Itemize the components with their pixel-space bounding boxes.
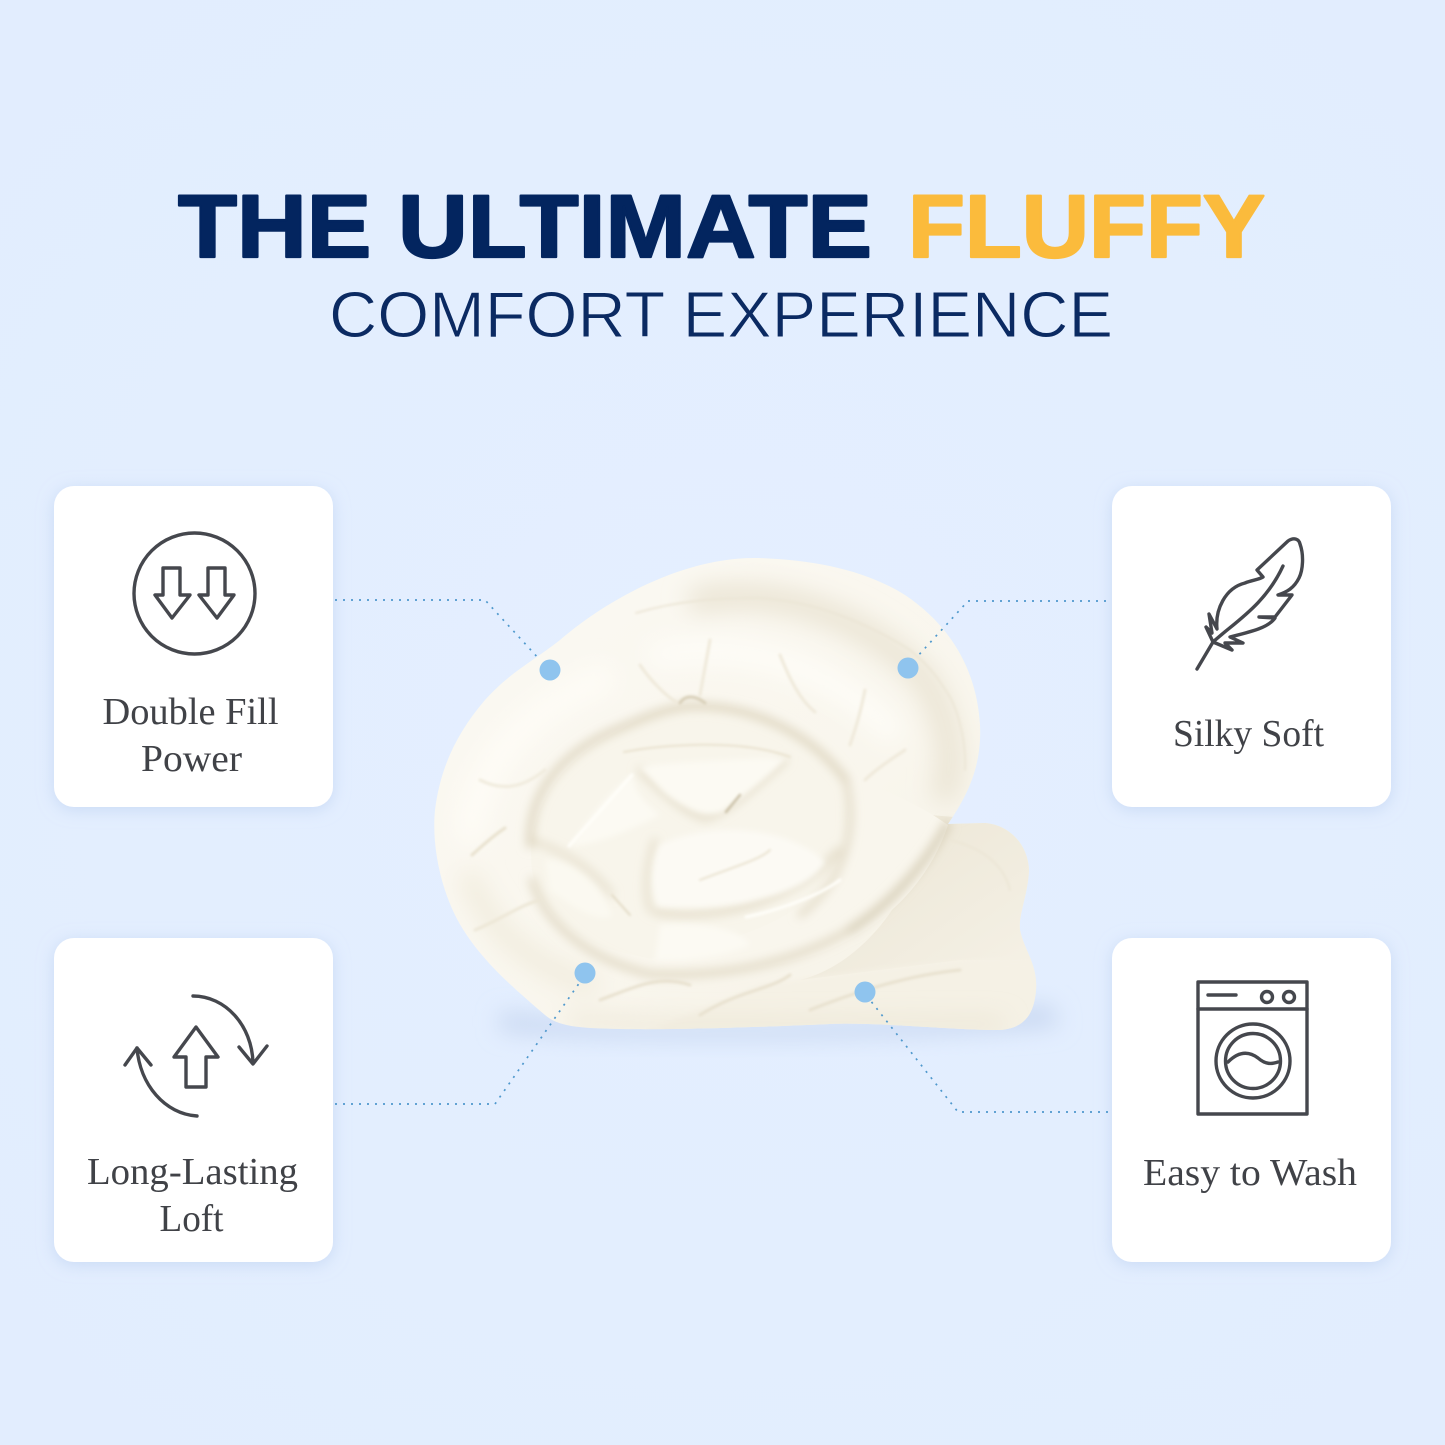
callout dot: long-lasting loft [574,962,596,984]
label: long-lasting loft [87,1151,298,1240]
title line 1: THE ULTIMATE [178,176,872,276]
broad soft shading on outer band [470,597,1000,1026]
dotted connector: long-lasting loft [335,982,580,1104]
label: double fill power: Power [141,738,242,780]
duvet tail [812,816,1029,977]
inner roll [531,704,849,958]
fine crease lines [472,598,1010,1015]
dotted connector: silky soft [916,601,1106,658]
label: long-lasting loft: Loft [160,1198,224,1240]
callout dot: easy to wash [854,982,876,1002]
label: easy to wash: Easy to Wash [1143,1152,1357,1194]
icon: feather [1197,539,1303,669]
duvet shadow [500,1005,1060,1038]
soft lower wrap blending into tail [1016,1012,1031,1026]
callout dot: double fill [540,660,560,680]
card: long-lasting loft [54,938,333,1262]
title line 2: COMFORT EXPERIENCE [329,278,1113,351]
rolled white duvet [434,558,1045,1040]
lower ring of roll [893,815,948,908]
dotted connector: double fill [335,600,540,660]
label: double fill power: Double Fill [102,691,278,733]
card: silky soft [1112,486,1391,807]
dotted connector: easy to wash [870,1000,1108,1112]
label: silky soft: Silky Soft [1173,713,1324,755]
flap and fold highlights [642,758,825,908]
card: double fill power [54,486,333,807]
callout dot: silky soft [898,658,918,678]
title line 1: FLUFFY [908,176,1265,276]
title [178,176,1265,351]
icon: double down arrows [134,533,255,654]
icon: washing machine [1198,982,1307,1114]
icon: loft cycle arrows [125,996,267,1116]
label: double fill power [102,691,278,780]
card: easy to wash [1112,938,1391,1262]
soft crevice shadows around the roll [530,706,947,974]
label: long-lasting loft: Long-Lasting [87,1151,298,1193]
